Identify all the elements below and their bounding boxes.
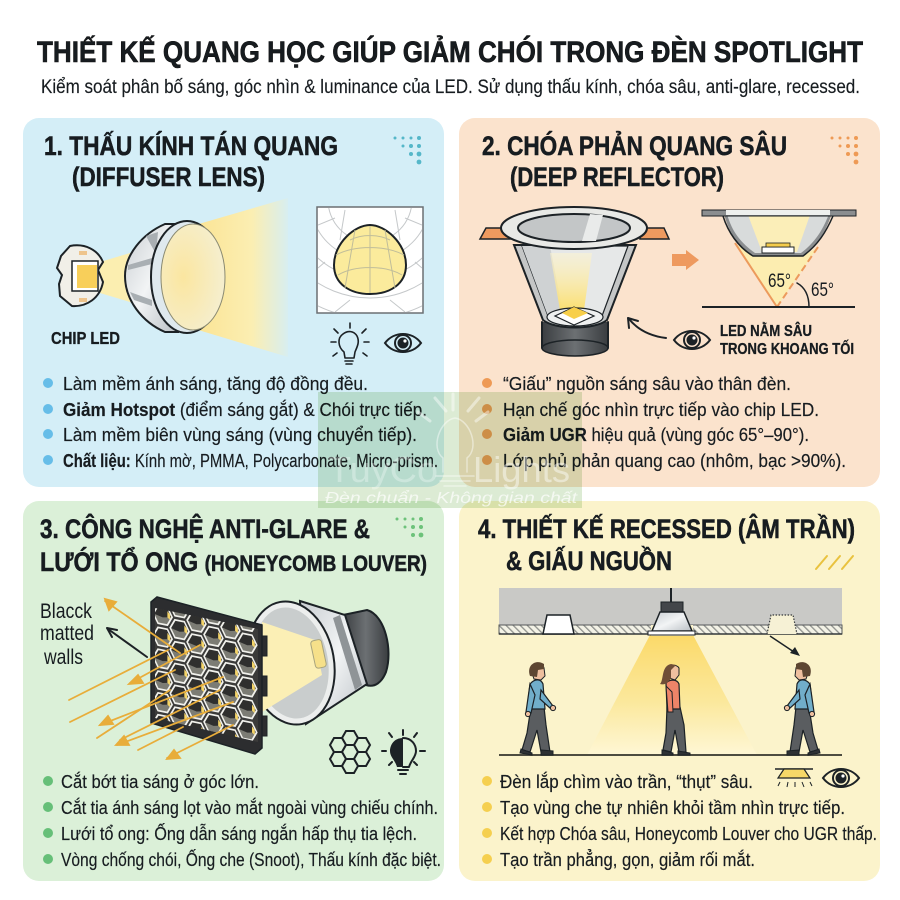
callout: LED sits deep: LED NẰM SÂU <box>720 321 812 340</box>
callout: LED sits deep: TRONG KHOANG TỐI <box>720 338 854 358</box>
person: centre <box>660 664 690 755</box>
person: right <box>784 662 820 755</box>
icon: eye <box>674 331 710 349</box>
arrow: curved to LED cavity <box>628 318 666 338</box>
watermark logo: Đèn chuẩn - Không gian chất <box>325 489 578 507</box>
watermark logo <box>318 392 582 508</box>
person: left <box>520 662 556 755</box>
icon: recessed lamp <box>775 769 813 787</box>
decorative dots: panel 3 <box>396 517 423 537</box>
label: black matted walls: matted <box>40 622 94 645</box>
bullets: panel 3: Cắt bớt tia sáng ở góc lớn. <box>61 771 259 792</box>
illustration: ceiling section <box>499 588 842 656</box>
decorative dots: panel 1 <box>394 136 421 164</box>
illustration: LED chip and diffuser lens <box>57 198 288 357</box>
bullets: panel 3: Vòng chống chói, Ống che (Snoot), Thấu kính đặc biệt. <box>61 849 441 870</box>
label: black matted walls: Blacck <box>40 600 92 623</box>
icon: honeycomb <box>330 731 370 773</box>
bullets: panel 3: Cắt tia ánh sáng lọt vào mắt ngoài vùng chiếu chính. <box>61 797 438 818</box>
bullets: panel 1: Giảm Hotspot (điểm sáng gắt) & Chói trực tiếp. <box>63 399 427 420</box>
icon: half-shaded bulb <box>382 730 425 774</box>
bullets: panel 4: Tạo trần phẳng, gọn, giảm rối mắt. <box>500 849 755 870</box>
diagram: cross-section with 65 degree cut-off <box>702 210 856 307</box>
heading: panel 4 <box>478 513 855 576</box>
watermark logo: Lights <box>473 449 570 490</box>
panel: anti-glare and honeycomb louver <box>23 501 444 881</box>
floor line <box>499 754 842 756</box>
panel: diffuser lens <box>23 118 444 487</box>
heading: panel 1: (DIFFUSER LENS) <box>72 162 265 192</box>
light rays <box>69 599 233 759</box>
heading: panel 2: 2. CHÓA PHẢN QUANG SÂU <box>482 129 787 161</box>
heading: panel 1: 1. THẤU KÍNH TÁN QUANG <box>44 130 338 161</box>
heading: panel 3: LƯỚI TỔ ONG (HONEYCOMB LOUVER) <box>40 546 427 577</box>
heading: panel 3 <box>40 513 427 577</box>
bullets: panel 3: Lưới tổ ong: Ống dẫn sáng ngắn hấp thụ tia lệch. <box>61 823 417 844</box>
polar light distribution diagram <box>316 206 424 314</box>
panel: deep reflector <box>459 118 880 487</box>
callout: LED sits deep <box>720 321 854 358</box>
diagram: cross-section with 65 degree cut-off: 65° <box>768 271 791 292</box>
illustration: light beam <box>587 635 757 755</box>
illustration: deep reflector downlight <box>480 207 669 356</box>
icon: eye <box>823 769 859 787</box>
arrow: to walls <box>107 628 147 657</box>
panel: recessed design <box>459 501 880 881</box>
heading: panel 2 <box>482 129 787 192</box>
bullets: panel 2: Giảm UGR hiệu quả (vùng góc 65°–90°). <box>503 424 809 445</box>
bullets: panel 2: Lớp phủ phản quang cao (nhôm, bạc >90%). <box>503 450 846 471</box>
label: black matted walls <box>40 600 94 669</box>
bullets: panel 3 <box>43 771 441 870</box>
heading: panel 1 <box>44 130 338 192</box>
diagram: cross-section with 65 degree cut-off: 65° <box>811 280 834 301</box>
bullets: panel 1: Chất liệu: Kính mờ, PMMA, Polycarbonate, Micro-prism. <box>63 450 438 471</box>
decorative slashes: panel 4 <box>816 556 853 569</box>
decorative dots: panel 2 <box>830 136 858 164</box>
bullets: panel 4: Đèn lắp chìm vào trần, “thụt” sâu. <box>500 771 753 792</box>
arrow: orange <box>672 250 699 270</box>
illustration: honeycomb louver <box>150 594 267 763</box>
label: black matted walls: walls <box>43 646 83 669</box>
bullets: panel 2 <box>482 373 846 471</box>
bullets: panel 4: Tạo vùng che tự nhiên khỏi tầm nhìn trực tiếp. <box>500 797 845 818</box>
label: chip LED: CHIP LED <box>51 328 120 348</box>
bullets: panel 1: Làm mềm biên vùng sáng (vùng chuyển tiếp). <box>63 424 417 445</box>
heading: panel 2: (DEEP REFLECTOR) <box>510 162 724 192</box>
icon: eye <box>385 334 421 352</box>
bullets: panel 2: Hạn chế góc nhìn trực tiếp vào chip LED. <box>503 399 819 420</box>
bullets: panel 1: Làm mềm ánh sáng, tăng độ đồng đều. <box>63 373 368 394</box>
bullets: panel 1 <box>43 373 438 471</box>
watermark logo: TuyCo <box>328 449 438 490</box>
bullets: panel 4 <box>482 771 877 870</box>
bullets: panel 2: “Giấu” nguồn sáng sâu vào thân đèn. <box>503 373 791 394</box>
icon: light bulb <box>331 323 369 364</box>
illustration: lamp with reflector <box>238 594 389 732</box>
heading: panel 4: & GIẤU NGUỒN <box>506 545 672 576</box>
heading: panel 3: 3. CÔNG NGHỆ ANTI-GLARE & <box>40 513 370 544</box>
